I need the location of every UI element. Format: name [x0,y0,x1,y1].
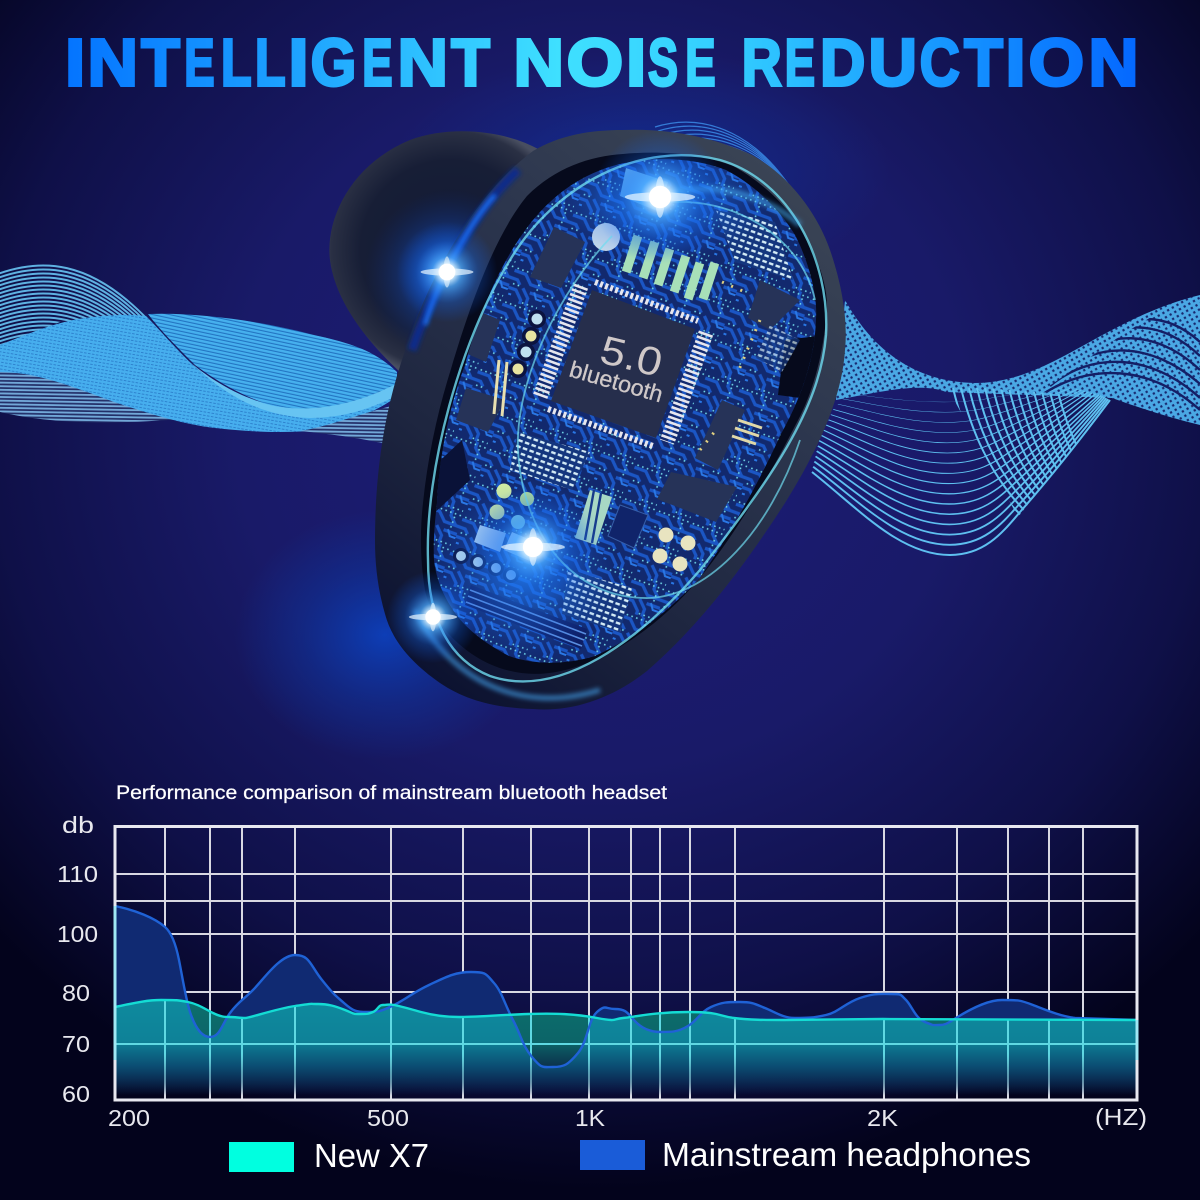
title: E [362,26,393,100]
wave: right upper mesh [148,314,397,412]
light swirl rings [415,155,826,698]
flare: lower left [387,571,479,663]
title: N [398,26,448,100]
chip label: bluetooth [567,356,666,407]
title: I [288,26,309,100]
title: O [567,26,623,100]
title: N [1088,26,1138,100]
x axis labels [108,1104,1147,1131]
x axis labels: 500 [367,1105,409,1131]
shell inner recess [421,153,827,674]
y axis labels: 80 [62,980,90,1006]
wave: far-right dark lines [1040,319,1200,410]
dark component blocks [456,227,800,522]
gold contact bars [622,235,719,300]
title: R [742,26,782,100]
y axis labels: 60 [62,1081,90,1107]
blue glow behind earbud [235,50,890,760]
dark edge gaps [778,336,815,398]
title: G [311,26,356,100]
chart frame [115,826,1137,1100]
y axis labels: db [62,812,94,838]
legend: New X7: New X7 [314,1137,429,1174]
new X7 area [116,1001,1136,1095]
frame tint on teal edges [115,906,1137,1060]
white pads [474,525,506,552]
bluetooth chip [540,282,706,446]
title: I [65,26,85,100]
y axis labels: 110 [57,861,98,887]
legend: Mainstream headphones: Mainstream headphones [662,1136,1031,1173]
title: D [820,26,865,100]
chip body [551,290,695,438]
wave: lower grey ribbon [0,370,175,422]
left sound wave [0,265,397,444]
title: N [514,26,564,100]
flare: top [593,130,727,264]
wave: bright main band [0,315,396,432]
legend: New X7 [229,1137,429,1174]
title: O [1029,26,1084,100]
title: T [451,26,490,100]
x axis labels: 1K [575,1105,606,1131]
blue light haze on board [444,159,756,651]
cyan block [620,168,668,208]
x axis labels: 200 [108,1105,150,1131]
title: N [88,26,138,100]
title: U [868,26,917,100]
wave: bright highlight strip [190,362,396,418]
earbud [329,130,846,709]
flare: centre bottom [472,486,594,608]
shell blue edge light [412,170,518,350]
shell [375,130,846,709]
ear tip [329,131,540,374]
wave: dense upper band [836,295,1200,425]
y axis labels: 100 [57,921,98,947]
title: L [221,26,252,100]
flare: left [397,222,497,322]
capacitor dark rings [453,310,546,583]
wave: nested bowl lines [812,386,1110,555]
title: T [964,26,1003,100]
grid [115,826,1137,1100]
y axis labels [57,812,98,1107]
wave: trailing stripes [300,406,392,444]
y axis labels: 70 [62,1031,90,1057]
x axis labels: 2K [867,1105,899,1131]
title: I [1005,26,1026,100]
gold traces dots [700,282,760,450]
title: C [920,26,960,100]
title: E [184,26,215,100]
title: E [685,26,716,100]
wave: top-right faint lines [655,122,807,210]
flex connector [465,585,587,649]
round contact [592,223,620,251]
striped components [575,490,612,545]
white dot grids [510,210,800,632]
circuit board [434,159,816,663]
chart subtitle: Performance comparison of mainstream bluetooth headset [116,783,668,804]
title: T [141,26,180,100]
chip label [567,328,667,407]
ear tip blue glow [374,200,478,337]
wave: back ribbon [0,264,146,345]
title: I [626,26,646,100]
small capacitors [456,314,696,580]
new X7 line [115,1000,1137,1020]
chip pins [540,282,706,446]
mainstream headphones area [115,906,1137,1100]
mainstream headphones line [115,906,1137,1067]
wave: crossing hatch [952,388,1076,515]
chip label: 5.0 [596,328,667,386]
x axis labels: (HZ) [1095,1104,1147,1130]
title: L [255,26,286,100]
frequency response chart [115,826,1137,1100]
right sound wave [655,122,1200,555]
title: E [785,26,815,100]
title: S [648,26,678,100]
